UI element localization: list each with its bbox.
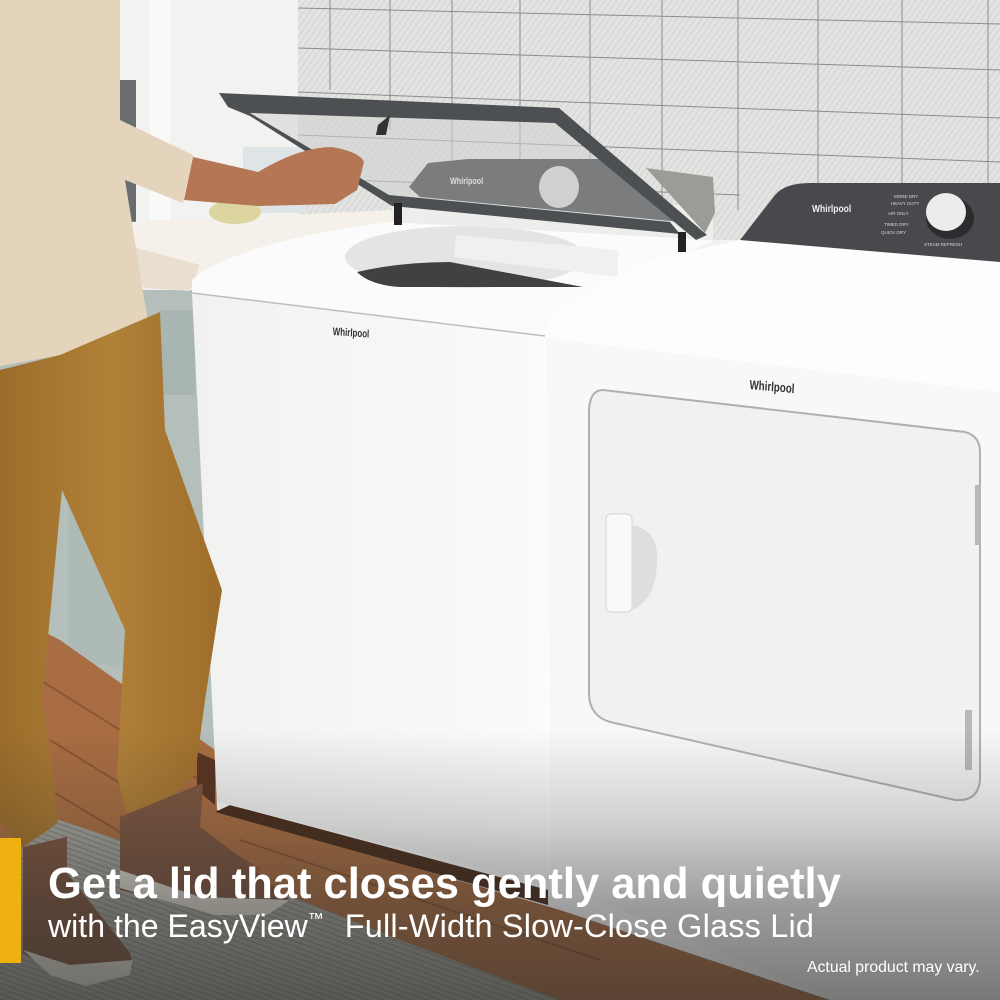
dryer control panel: STEAM REFRESH (924, 242, 962, 247)
bottom dark gradient (0, 730, 1000, 1000)
subheading: with the EasyView Full-Width Slow-Close Glass Lid (48, 908, 814, 944)
headline: Get a lid that closes gently and quietly (48, 860, 841, 908)
dryer body (546, 183, 1000, 1000)
disclaimer: Actual product may vary. (807, 959, 980, 976)
floor (0, 610, 830, 1000)
tissue box (243, 147, 306, 213)
brand logo: dryer: Whirlpool (749, 377, 795, 396)
dryer control panel: HEAVY DUTY (891, 201, 919, 206)
wall and window (0, 0, 1000, 300)
dryer control panel: MORE DRY (894, 194, 918, 199)
dryer door (589, 390, 981, 800)
glass lid (219, 93, 715, 252)
brand logo: control panel: Whirlpool (812, 204, 851, 215)
rug (0, 817, 560, 1000)
person (0, 0, 364, 986)
brand logo: lid reflection: Whirlpool (450, 176, 483, 186)
trousers (0, 312, 222, 847)
dryer control panel: AIR ONLY (888, 211, 909, 216)
right shoe (120, 783, 290, 915)
dryer control panel (740, 183, 1000, 262)
subheading: ™ (308, 911, 324, 928)
left shoe (23, 837, 133, 983)
counter and cabinet (0, 210, 392, 760)
yellow accent bar (0, 838, 21, 963)
dryer control panel: QUICK DRY (881, 230, 906, 235)
arm and hand (184, 147, 364, 206)
icon: bowl on counter (209, 200, 261, 224)
dryer control panel: TIMED DRY (884, 222, 909, 227)
sweater (0, 0, 193, 366)
washer body (192, 205, 713, 905)
brand logo: washer: Whirlpool (333, 326, 369, 341)
